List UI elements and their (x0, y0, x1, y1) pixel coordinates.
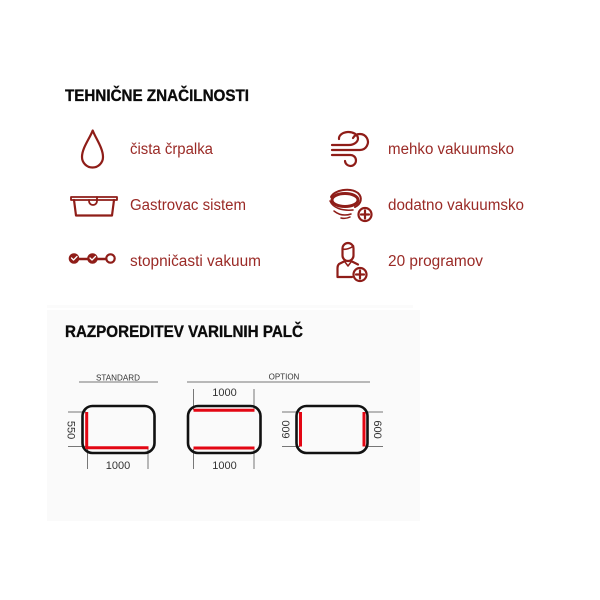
icon: gastro container (71, 197, 117, 216)
diagram: standard layout: 550 (64, 421, 76, 439)
icon: water drop (82, 130, 103, 167)
diagram: standard layout: 1000 (106, 460, 130, 472)
diagram: standard layout: STANDARD (96, 374, 140, 382)
icon: person with plus (338, 243, 366, 281)
heading: burner layout: RAZPOREDITEV VARILNIH PALČ (65, 322, 303, 341)
label: step vacuum: stopničasti vakuum (130, 253, 261, 270)
diagram: option layout with side burners: 600 (371, 420, 383, 439)
diagram: option layout with top and bottom burners: OPTION (269, 372, 300, 382)
icon: step vacuum (70, 254, 115, 263)
diagram: standard layout (64, 374, 158, 472)
icon: coil with plus (330, 190, 372, 221)
diagram: option layout with top and bottom burners: 1000 (212, 387, 237, 399)
diagram: option layout with top and bottom burners: 1000 (212, 460, 237, 472)
icon: wind (332, 132, 368, 166)
label: 20 programs: 20 programov (388, 253, 483, 270)
panel: burner layout background (47, 310, 420, 521)
label: Gastrovac system: Gastrovac sistem (130, 197, 246, 214)
heading: technical features: TEHNIČNE ZNAČILNOSTI (65, 86, 249, 105)
diagram: option layout with side burners: 600 (280, 420, 292, 439)
diagram: option layout with side burners (280, 406, 383, 453)
label: clean pump: čista črpalka (130, 141, 213, 158)
diagram: option layout with top and bottom burners (187, 372, 370, 472)
label: soft vacuum: mehko vakuumsko (388, 141, 514, 158)
label: additional vacuum: dodatno vakuumsko (388, 197, 524, 214)
